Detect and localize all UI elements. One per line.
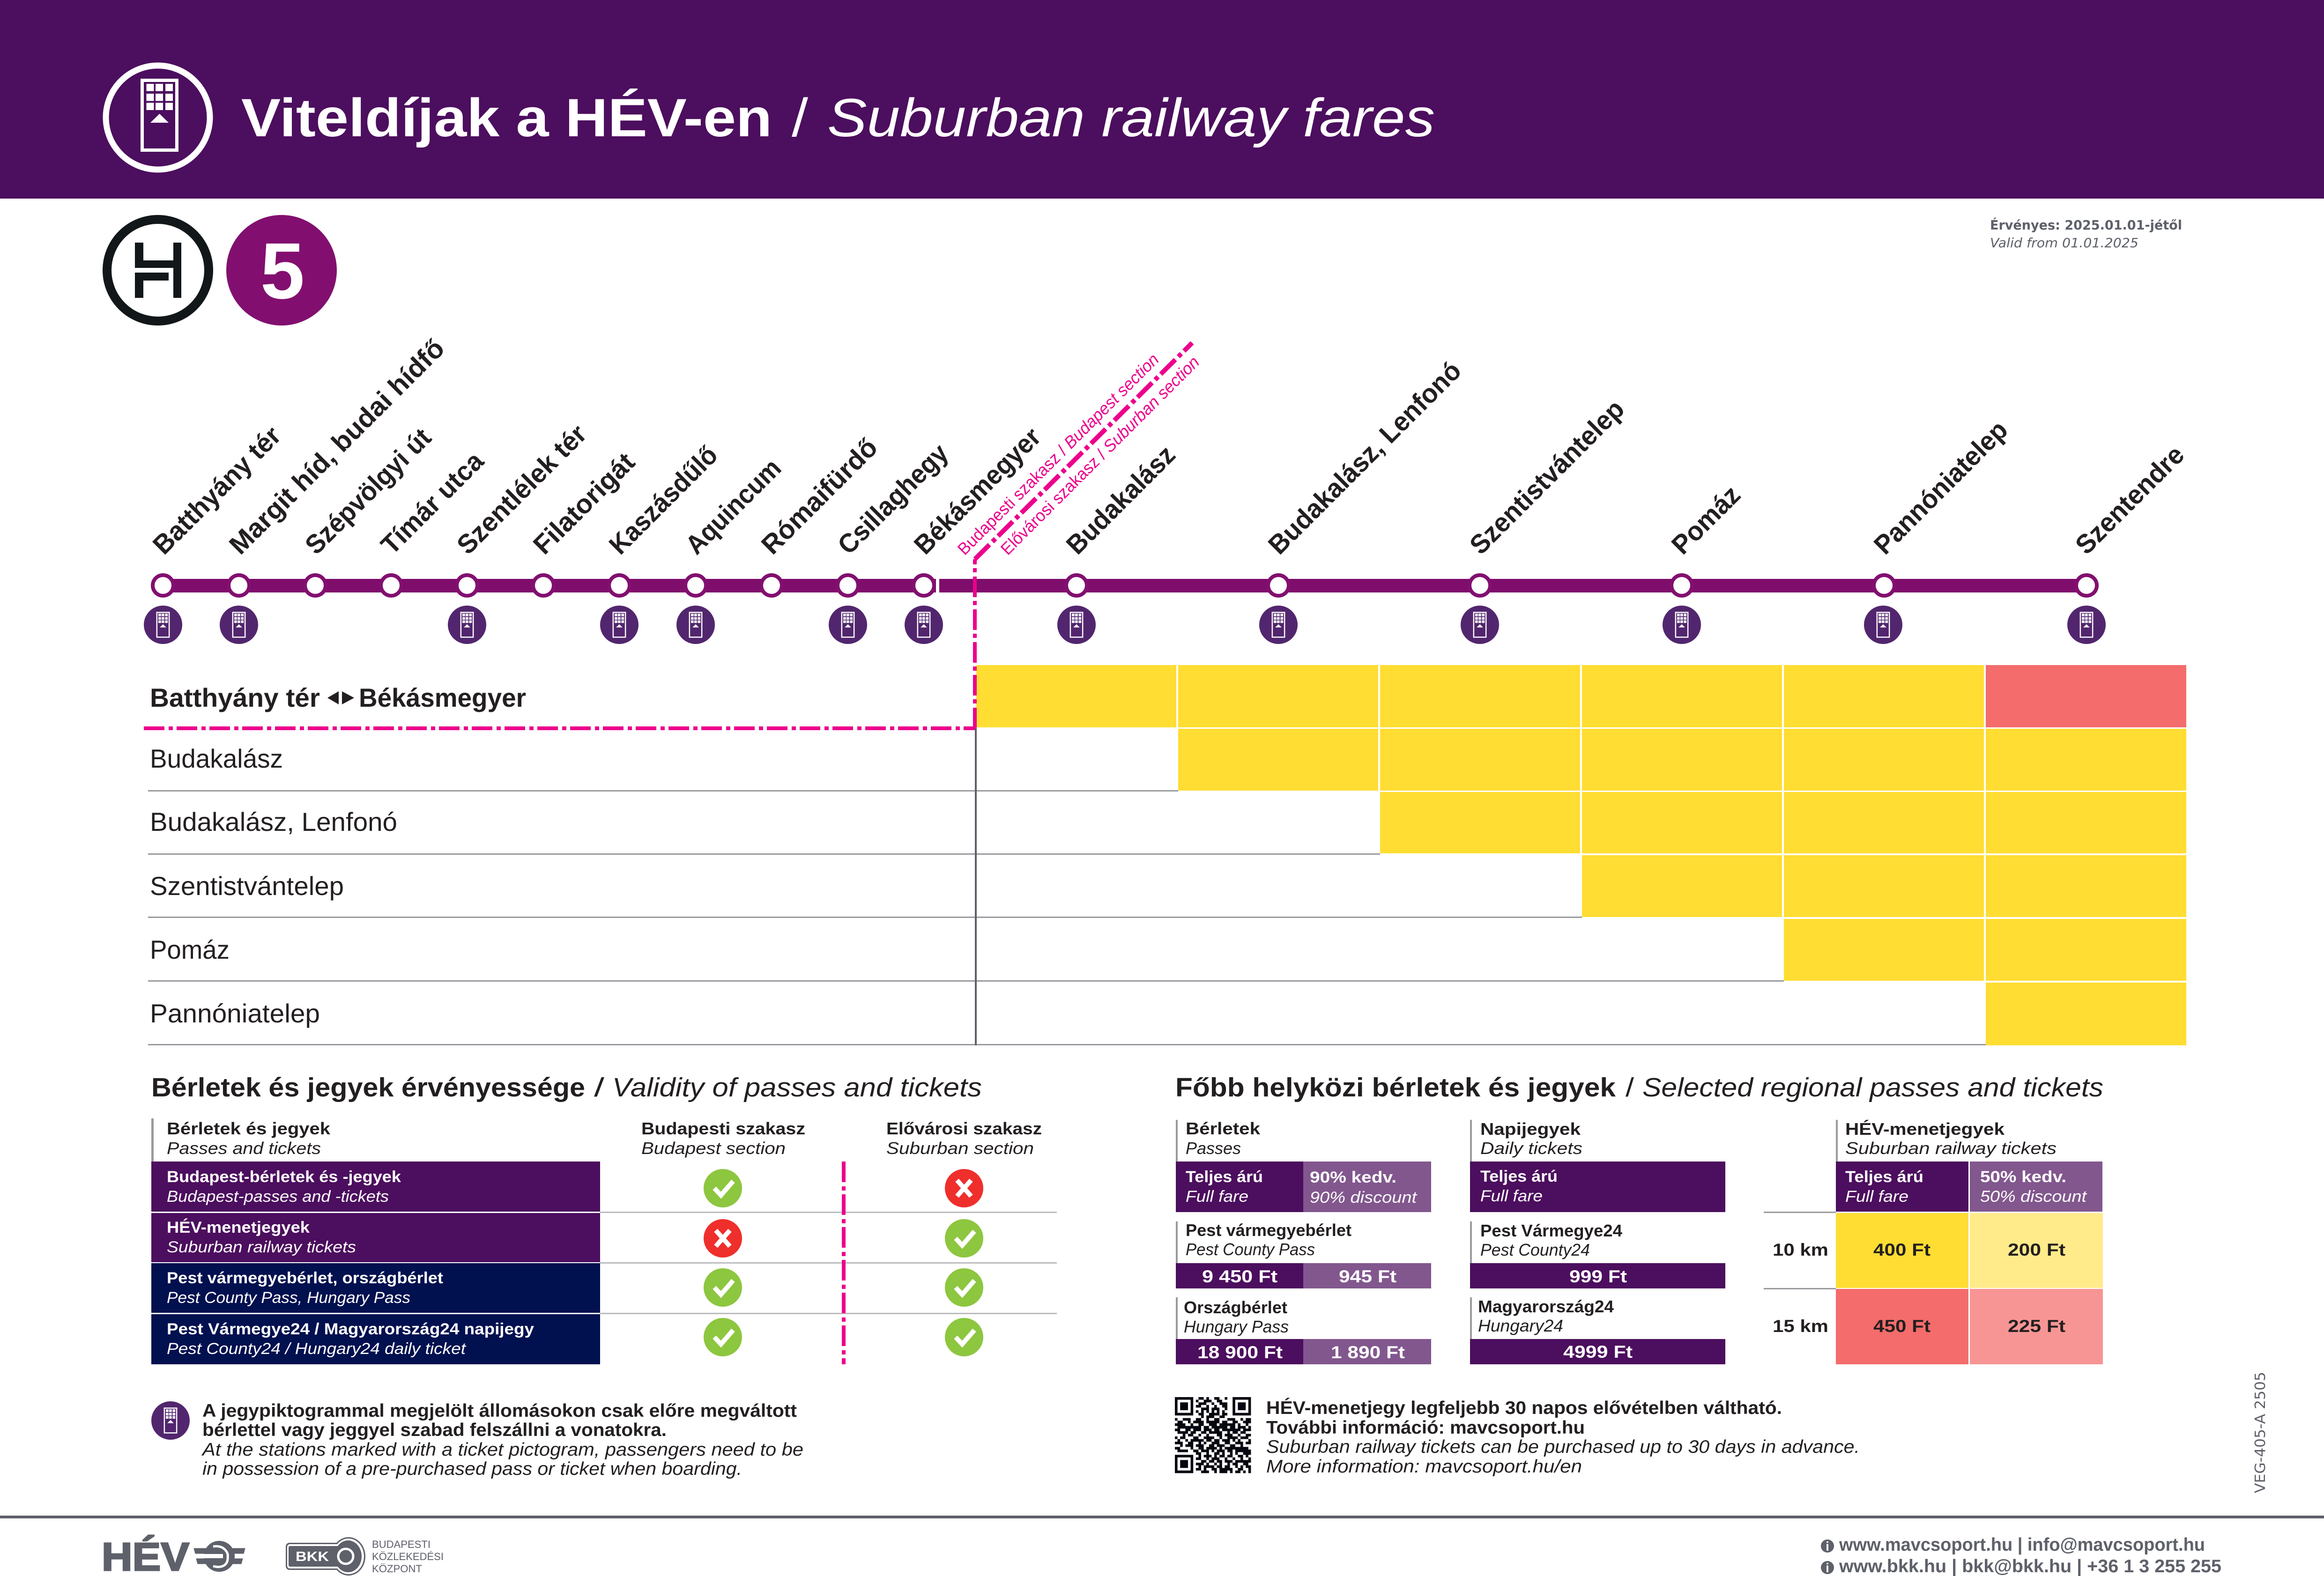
title <box>241 88 1435 148</box>
validity date: Érvényes: 2025.01.01-jétől <box>1990 217 2182 233</box>
panel: daily tickets: Napijegyek <box>1480 1119 1581 1139</box>
contact information <box>1821 1535 2221 1576</box>
validity row names: HÉV-menetjegyek <box>167 1219 310 1236</box>
ticket pictograms under stations <box>144 606 2106 644</box>
station names: Kaszásdűlő <box>603 440 724 560</box>
section boundary: dash-dot line <box>144 343 1192 728</box>
panel: suburban railway tickets: 50% discount <box>1980 1188 2087 1206</box>
title: Viteldíjak a HÉV-en <box>241 88 772 148</box>
panel: passes: Teljes árú <box>1186 1168 1263 1186</box>
heading: validity of passes and tickets: / <box>594 1073 604 1102</box>
matrix row rules <box>148 728 1986 1045</box>
icon: line number 5 <box>226 215 337 326</box>
note: advance purchase: További információ: mavcsoport.hu <box>1266 1418 1585 1438</box>
validity row names: Pest Vármegye24 / Magyarország24 napijegy <box>167 1320 534 1338</box>
panel: passes: 1 890 Ft <box>1331 1343 1405 1362</box>
validity table header: Budapesti szakasz <box>641 1119 805 1138</box>
matrix row labels: Budakalász, Lenfonó <box>150 807 397 836</box>
panel: passes: 90% discount <box>1310 1189 1418 1206</box>
heading: selected regional passes and tickets: Főbb helyközi bérletek és jegyek <box>1175 1073 1616 1102</box>
validity table header: Budapest section <box>641 1139 786 1158</box>
logo: HÉV <box>102 1535 245 1576</box>
matrix row labels: Pannóniatelep <box>150 999 320 1028</box>
heading: validity of passes and tickets: Bérletek és jegyek érvényessége <box>151 1073 585 1102</box>
panel: passes: 90% kedv. <box>1310 1169 1396 1186</box>
panel: daily tickets: Magyarország24 <box>1478 1297 1614 1316</box>
panel: suburban railway tickets: 225 Ft <box>2008 1317 2065 1336</box>
panel: suburban railway tickets: 400 Ft <box>1873 1240 1930 1259</box>
panel: daily tickets: Pest Vármegye24 <box>1480 1221 1622 1240</box>
panel: passes: Bérletek <box>1186 1119 1261 1138</box>
icon: ticket in circle <box>106 66 210 170</box>
contact information: www.bkk.hu | bkk@bkk.hu | +36 1 3 255 255 <box>1839 1556 2221 1576</box>
panel: suburban railway tickets: 15 km <box>1773 1317 1828 1336</box>
icon: ticket pictogram note <box>151 1401 190 1440</box>
station names: Filatorigát <box>527 447 641 560</box>
validity table header: Bérletek és jegyek <box>167 1119 331 1138</box>
fare matrix cells <box>976 665 2186 1045</box>
validity table <box>151 1118 1057 1364</box>
panel: passes <box>1176 1119 1431 1364</box>
panel: suburban railway tickets: Suburban railway tickets <box>1845 1139 2057 1158</box>
matrix row labels: Batthyány tér <box>150 683 320 712</box>
matrix row labels: Békásmegyer <box>359 683 526 712</box>
panel: daily tickets: 4999 Ft <box>1563 1342 1633 1361</box>
validity table header <box>167 1119 1042 1158</box>
validity row names: Pest vármegyebérlet, országbérlet <box>167 1269 443 1287</box>
logo: BKK: BUDAPESTI <box>372 1539 431 1550</box>
validity row names: Suburban railway tickets <box>167 1238 356 1256</box>
validity row names: Budapest-passes and -tickets <box>167 1188 389 1206</box>
note: pre-purchased tickets: A jegypiktogrammal megjelölt állomásokon csak előre megváltott <box>202 1401 797 1421</box>
note: pre-purchased tickets: in possession of a pre-purchased pass or ticket when boarding. <box>202 1459 742 1479</box>
station names: Pomáz <box>1666 480 1746 560</box>
matrix row labels: Budakalász <box>150 744 283 773</box>
heading: validity of passes and tickets: Validity of passes and tickets <box>612 1073 982 1102</box>
panel: suburban railway tickets: 10 km <box>1773 1240 1828 1259</box>
icon: line number 5: 5 <box>260 227 304 316</box>
note: pre-purchased tickets <box>201 1401 803 1479</box>
heading: selected regional passes and tickets: / <box>1626 1073 1634 1102</box>
panel: daily tickets: Hungary24 <box>1478 1316 1563 1335</box>
section labels on diagonal: Elővárosi szakasz / Suburban section <box>997 352 1203 559</box>
station names: Tímár utca <box>375 445 490 560</box>
panel: suburban railway tickets: 200 Ft <box>2008 1240 2065 1259</box>
panel: daily tickets: Pest County24 <box>1480 1240 1590 1259</box>
panel: passes: 9 450 Ft <box>1202 1267 1277 1286</box>
validity check and cross icons <box>704 1169 983 1356</box>
note: pre-purchased tickets: bérlettel vagy jeggyel szabad felszállni a vonatokra. <box>202 1420 667 1440</box>
panel: passes: Full fare <box>1186 1188 1248 1206</box>
panel: daily tickets: 999 Ft <box>1569 1267 1627 1286</box>
station names: Margit híd, budai hídfő <box>223 333 450 560</box>
section labels on diagonal: Budapesti szakasz / Budapest section <box>954 349 1163 559</box>
QR code <box>1175 1397 1251 1473</box>
validity row bars <box>151 1162 600 1364</box>
note: advance purchase: Suburban railway tickets can be purchased up to 30 days in advance. <box>1266 1437 1860 1457</box>
panel: daily tickets <box>1470 1119 1725 1364</box>
heading: selected regional passes and tickets: Selected regional passes and tickets <box>1642 1073 2103 1102</box>
station names: Szentlélek tér <box>451 419 593 560</box>
validity row names: Pest County Pass, Hungary Pass <box>167 1289 410 1307</box>
panel: passes: 945 Ft <box>1339 1267 1396 1286</box>
document code: VEG-405-A 2505 <box>2252 1372 2269 1493</box>
panel: passes: Passes <box>1186 1139 1241 1158</box>
header band <box>0 0 2324 199</box>
panel: suburban railway tickets: 50% kedv. <box>1980 1168 2066 1186</box>
logo: BKK <box>286 1537 444 1576</box>
logo: BKK: BKK <box>296 1549 329 1564</box>
validity row names <box>167 1168 534 1358</box>
note: pre-purchased tickets: At the stations marked with a ticket pictogram, passengers need to be <box>201 1440 803 1460</box>
panel: suburban railway tickets: Teljes árú <box>1845 1168 1923 1186</box>
panel: passes: Pest County Pass <box>1186 1240 1315 1259</box>
logo: BKK: KÖZPONT <box>372 1563 422 1575</box>
note: advance purchase: HÉV-menetjegy legfeljebb 30 napos elővételben váltható. <box>1266 1398 1782 1418</box>
station names: Szépvölgyi út <box>299 422 437 560</box>
route line with stations <box>153 575 2097 596</box>
station names: Pannóniatelep <box>1868 415 2013 560</box>
footer rule <box>0 1516 2324 1518</box>
validity date: Valid from 01.01.2025 <box>1990 235 2138 251</box>
validity date <box>1990 217 2182 251</box>
contact information: i <box>1826 1561 1829 1575</box>
note: advance purchase: More information: mavcsoport.hu/en <box>1266 1457 1582 1477</box>
logo: BKK: KÖZLEKEDÉSI <box>372 1551 444 1562</box>
matrix row labels: Pomáz <box>150 935 230 964</box>
station names: Budakalász, Lenfonó <box>1262 355 1467 560</box>
heading: selected regional passes and tickets <box>1175 1073 2103 1102</box>
station names: Rómaifürdő <box>756 432 884 560</box>
panel: passes: Országbérlet <box>1184 1298 1287 1317</box>
station names: Szentistvántelep <box>1464 394 1630 560</box>
panel: passes: Pest vármegyebérlet <box>1186 1221 1351 1240</box>
panel: suburban railway tickets <box>1764 1119 2103 1364</box>
panel: passes: Hungary Pass <box>1184 1317 1289 1336</box>
title: Suburban railway fares <box>827 88 1435 148</box>
matrix row labels <box>150 683 526 1028</box>
station names: Békásmegyer <box>908 422 1047 560</box>
station names: Budakalász <box>1061 440 1181 560</box>
panel: suburban railway tickets: HÉV-menetjegyek <box>1845 1119 2005 1139</box>
panel: passes: 18 900 Ft <box>1197 1343 1283 1362</box>
validity table header: Suburban section <box>886 1139 1034 1158</box>
icon: H suburban railway logo <box>107 219 209 321</box>
station names: Batthyány tér <box>147 421 287 560</box>
station names: Aquincum <box>680 453 787 560</box>
matrix row labels: Szentistvántelep <box>150 871 344 901</box>
note: advance purchase <box>1266 1398 1860 1477</box>
validity row names: Pest County24 / Hungary24 daily ticket <box>167 1340 467 1358</box>
panel: daily tickets: Daily tickets <box>1480 1139 1582 1158</box>
station names: Szentendre <box>2070 440 2190 560</box>
contact information: i <box>1826 1539 1829 1554</box>
title: / <box>792 88 808 148</box>
contact information: www.mavcsoport.hu | info@mavcsoport.hu <box>1839 1535 2205 1555</box>
validity table header: Elővárosi szakasz <box>886 1119 1042 1138</box>
panel: daily tickets: Full fare <box>1480 1187 1543 1205</box>
station names: Csillaghegy <box>832 438 954 560</box>
validity row names: Budapest-bérletek és -jegyek <box>167 1168 401 1186</box>
panel: daily tickets: Teljes árú <box>1480 1168 1558 1185</box>
validity table header: Passes and tickets <box>167 1139 321 1158</box>
panel: suburban railway tickets: Full fare <box>1845 1188 1908 1206</box>
panel: suburban railway tickets: 450 Ft <box>1873 1317 1930 1336</box>
heading: validity of passes and tickets <box>151 1073 982 1102</box>
station names <box>147 333 2190 560</box>
